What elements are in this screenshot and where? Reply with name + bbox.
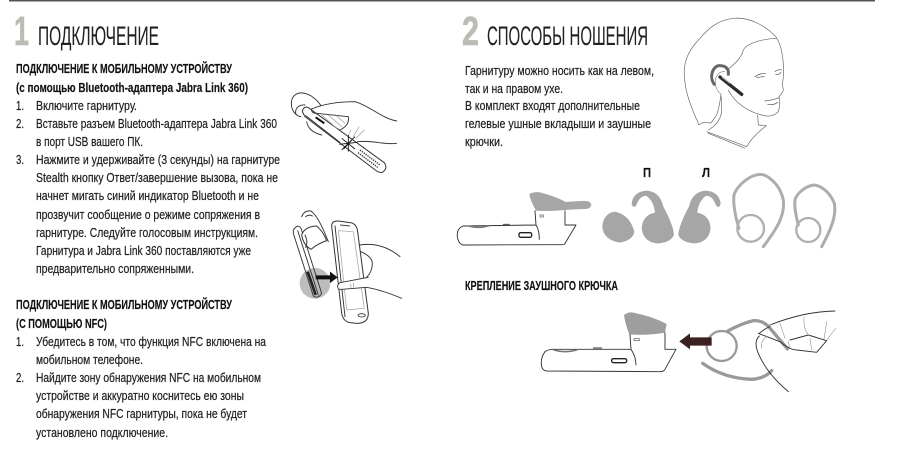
icon: large earhook [734, 174, 784, 247]
heading: connection: ПОДКЛЮЧЕНИЕ [38, 21, 159, 51]
text block: Bluetooth pairing: прозвучит сообщение о режиме сопряжения в [36, 207, 260, 222]
text block: NFC pairing: (С ПОМОЩЬЮ NFC) [16, 316, 107, 331]
text block: Bluetooth pairing [16, 61, 280, 276]
panel: section 1 connection [14, 8, 402, 440]
text block: Bluetooth pairing: ПОДКЛЮЧЕНИЕ К МОБИЛЬНОМУ УСТРОЙСТВУ [16, 61, 233, 76]
eargel right [632, 191, 674, 243]
eargel plain [602, 212, 634, 243]
text block: NFC pairing: мобильном телефоне. [36, 352, 143, 367]
icon: headset with eargel [457, 192, 591, 245]
text block: Bluetooth pairing: Вставьте разъем Bluetooth-адаптера Jabra Link 360 [36, 116, 277, 131]
text block: NFC pairing: 1. [16, 334, 24, 349]
text block: wearing description [465, 63, 654, 149]
icon: small earhook [795, 185, 835, 247]
text block: NFC pairing: обнаружения NFC гарнитуры, пока не будет [36, 406, 247, 421]
text block: Bluetooth pairing: в порт USB вашего ПК. [36, 134, 143, 149]
text block: NFC pairing: устройстве и аккуратно коснитесь ею зоны [36, 388, 244, 403]
label: left: Л [702, 165, 710, 180]
icon: eargels [602, 191, 721, 243]
section number 1: 1 [14, 8, 29, 54]
text block: NFC pairing: Убедитесь в том, что функция NFC включена на [36, 334, 267, 349]
text block: Bluetooth pairing: начнет мигать синий индикатор Bluetooth и не [36, 188, 259, 203]
icon: woman wearing headset [684, 18, 784, 148]
text block: Bluetooth pairing: предварительно сопряженными. [36, 261, 194, 276]
text block: wearing description: крючки. [465, 134, 503, 149]
text block: wearing description: В комплект входят дополнительные [465, 98, 640, 113]
icon: headset for earhook attachment [541, 312, 676, 372]
heading: attaching the earhook: КРЕПЛЕНИЕ ЗАУШНОГО КРЮЧКА [465, 278, 618, 293]
text block: Bluetooth pairing: Включите гарнитуру. [36, 98, 137, 113]
text block: Bluetooth pairing: 2. [16, 116, 24, 131]
text block: NFC pairing: установлено подключение. [36, 425, 168, 440]
icon: NFC phone touch [293, 211, 402, 323]
icon: hand pressing headset button [291, 93, 397, 172]
text block: Bluetooth pairing: гарнитуре. Следуйте голосовым инструкциям. [36, 225, 258, 240]
text block: Bluetooth pairing: Нажмите и удерживайте (3 секунды) на гарнитуре [36, 152, 280, 167]
text block: NFC pairing: ПОДКЛЮЧЕНИЕ К МОБИЛЬНОМУ УСТРОЙСТВУ [16, 297, 233, 312]
text block: NFC pairing [16, 297, 267, 440]
icon: hand holding earhook [679, 311, 836, 392]
panel: section 2 wearing styles [457, 8, 836, 392]
label: right: П [643, 165, 651, 180]
text block: Bluetooth pairing: (с помощью Bluetooth-адаптера Jabra Link 360) [16, 80, 248, 95]
text block: NFC pairing: 2. [16, 370, 24, 385]
eargel left [678, 191, 721, 243]
text block: Bluetooth pairing: 3. [16, 152, 24, 167]
text block: wearing description: гелевые ушные вкладыши и заушные [465, 116, 651, 131]
text block: NFC pairing: Найдите зону обнаружения NFC на мобильном [36, 370, 261, 385]
text block: wearing description: Гарнитуру можно носить как на левом, [465, 63, 654, 78]
section number 2: 2 [462, 8, 479, 54]
text block: Bluetooth pairing: Гарнитура и Jabra Link 360 поставляются уже [36, 243, 251, 258]
text block: Bluetooth pairing: Stealth кнопку Ответ/завершение вызова, пока не [36, 170, 278, 185]
text block: wearing description: так и на правом ухе. [465, 81, 563, 96]
arrow: direction of attachment [679, 333, 712, 349]
text block: Bluetooth pairing: 1. [16, 98, 24, 113]
heading: wearing styles: СПОСОБЫ НОШЕНИЯ [487, 21, 648, 51]
